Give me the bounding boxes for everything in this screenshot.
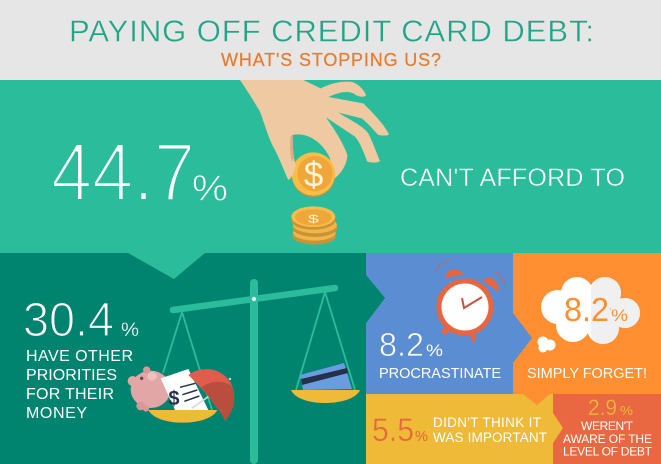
label: weren't aware of the level of debt bbox=[563, 419, 653, 458]
coin stack: $ bbox=[308, 213, 319, 225]
title: PAYING OFF CREDIT CARD DEBT: bbox=[69, 14, 594, 48]
icon: balance scale bbox=[128, 279, 360, 464]
percent sign: % bbox=[192, 168, 228, 208]
stat: 2.9%: 2.9 bbox=[588, 395, 617, 420]
pointer notch bbox=[128, 253, 205, 279]
label: have other priorities for their money: MONEY bbox=[26, 405, 87, 422]
icon: thought cloud bbox=[538, 277, 640, 352]
coin bbox=[292, 152, 335, 197]
percent sign: % bbox=[121, 320, 139, 341]
panel: simply forget bbox=[513, 253, 661, 394]
label: didn't think it was important: WAS IMPORTANT bbox=[433, 430, 547, 445]
panel: can't afford to bbox=[0, 80, 661, 253]
coin stack bbox=[291, 206, 338, 245]
piggy bank bbox=[128, 366, 171, 412]
header panel bbox=[0, 0, 661, 80]
left pan with piggy bank, bill and umbrella bbox=[128, 366, 234, 423]
label: simply forget: SIMPLY FORGET! bbox=[527, 366, 647, 382]
pointer notch bbox=[366, 275, 385, 323]
panel: didn't think it was important bbox=[366, 394, 553, 464]
subtitle: WHAT'S STOPPING US? bbox=[221, 50, 441, 70]
label: weren't aware of the level of debt: LEVEL OF DEBT bbox=[563, 444, 653, 458]
percent sign: % bbox=[426, 341, 443, 360]
panel: procrastinate bbox=[366, 253, 513, 394]
stat: 8.2%: 8.2 bbox=[379, 326, 424, 363]
label: procrastinate: PROCRASTINATE bbox=[379, 366, 501, 382]
pointer notch bbox=[523, 394, 550, 405]
label: weren't aware of the level of debt: WEREN'T bbox=[581, 419, 634, 433]
umbrella bbox=[188, 369, 234, 421]
label: have other priorities for their money: PRIORITIES bbox=[26, 367, 117, 384]
icon: alarm clock bbox=[434, 259, 506, 342]
percent sign: % bbox=[415, 428, 428, 445]
panel: have other priorities bbox=[0, 253, 366, 464]
label: can't afford to: CAN'T AFFORD TO bbox=[400, 164, 625, 192]
label: have other priorities for their money: HAVE OTHER bbox=[26, 348, 133, 365]
right pan with credit card bbox=[291, 363, 360, 403]
percent sign: % bbox=[620, 403, 633, 418]
pointer notch bbox=[553, 413, 563, 443]
label: have other priorities for their money bbox=[26, 348, 133, 422]
bill: $ bbox=[168, 388, 179, 410]
panel: weren't aware of the level of debt bbox=[553, 394, 661, 464]
coin: $ bbox=[304, 156, 323, 195]
label: weren't aware of the level of debt: AWARE OF THE bbox=[563, 432, 652, 446]
label: have other priorities for their money: FOR THEIR bbox=[26, 386, 114, 403]
label: didn't think it was important: DIDN'T THINK IT bbox=[433, 415, 541, 430]
stat: 44.7%: 44.7 bbox=[51, 126, 195, 218]
icon: hand dropping coin bbox=[240, 80, 389, 245]
stat: 5.5%: 5.5 bbox=[372, 412, 414, 448]
stat: 30.4%: 30.4 bbox=[23, 294, 114, 347]
percent sign: % bbox=[611, 306, 628, 325]
stat: 8.2%: 8.2 bbox=[564, 291, 609, 328]
label: didn't think it was important bbox=[433, 415, 547, 445]
pointer notch bbox=[513, 313, 532, 363]
